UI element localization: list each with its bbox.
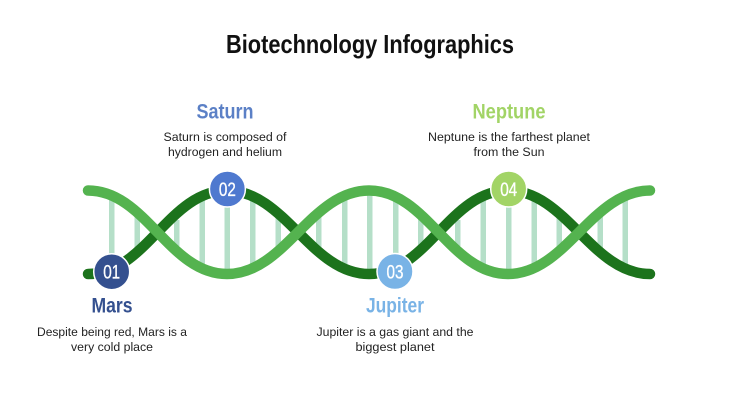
- label: Mars: Despite being red, Mars is a: [37, 325, 187, 339]
- label: Jupiter: [316, 294, 474, 354]
- label: Jupiter: Jupiter: [366, 294, 424, 318]
- marker 03: [377, 254, 413, 290]
- label: Neptune: Neptune: [472, 100, 546, 124]
- label: Mars: [37, 294, 187, 354]
- label: Jupiter: biggest planet: [356, 340, 435, 354]
- marker 02: [209, 171, 245, 207]
- dark strand: [88, 190, 650, 274]
- title: Biotechnology Infographics: [226, 29, 514, 59]
- label: Jupiter: Jupiter is a gas giant and the: [316, 325, 474, 339]
- marker 04: 04: [500, 180, 518, 201]
- label: Mars: very cold place: [71, 340, 153, 354]
- label: Neptune: Neptune is the farthest planet: [428, 130, 591, 144]
- label: Neptune: from the Sun: [474, 145, 545, 159]
- marker 02: 02: [219, 180, 236, 201]
- light strand: [88, 190, 650, 274]
- marker 01: [94, 254, 130, 290]
- label: Saturn: hydrogen and helium: [168, 145, 282, 159]
- label: Saturn: Saturn is composed of: [164, 130, 287, 144]
- DNA helix: [88, 190, 650, 274]
- marker 01: 01: [103, 262, 120, 284]
- label: Saturn: [164, 100, 287, 159]
- marker 04: [491, 171, 527, 207]
- marker 03: 03: [386, 262, 404, 284]
- label: Mars: Mars: [92, 294, 132, 318]
- label: Saturn: Saturn: [196, 100, 254, 124]
- label: Neptune: [428, 100, 591, 159]
- rungs: [109, 191, 628, 271]
